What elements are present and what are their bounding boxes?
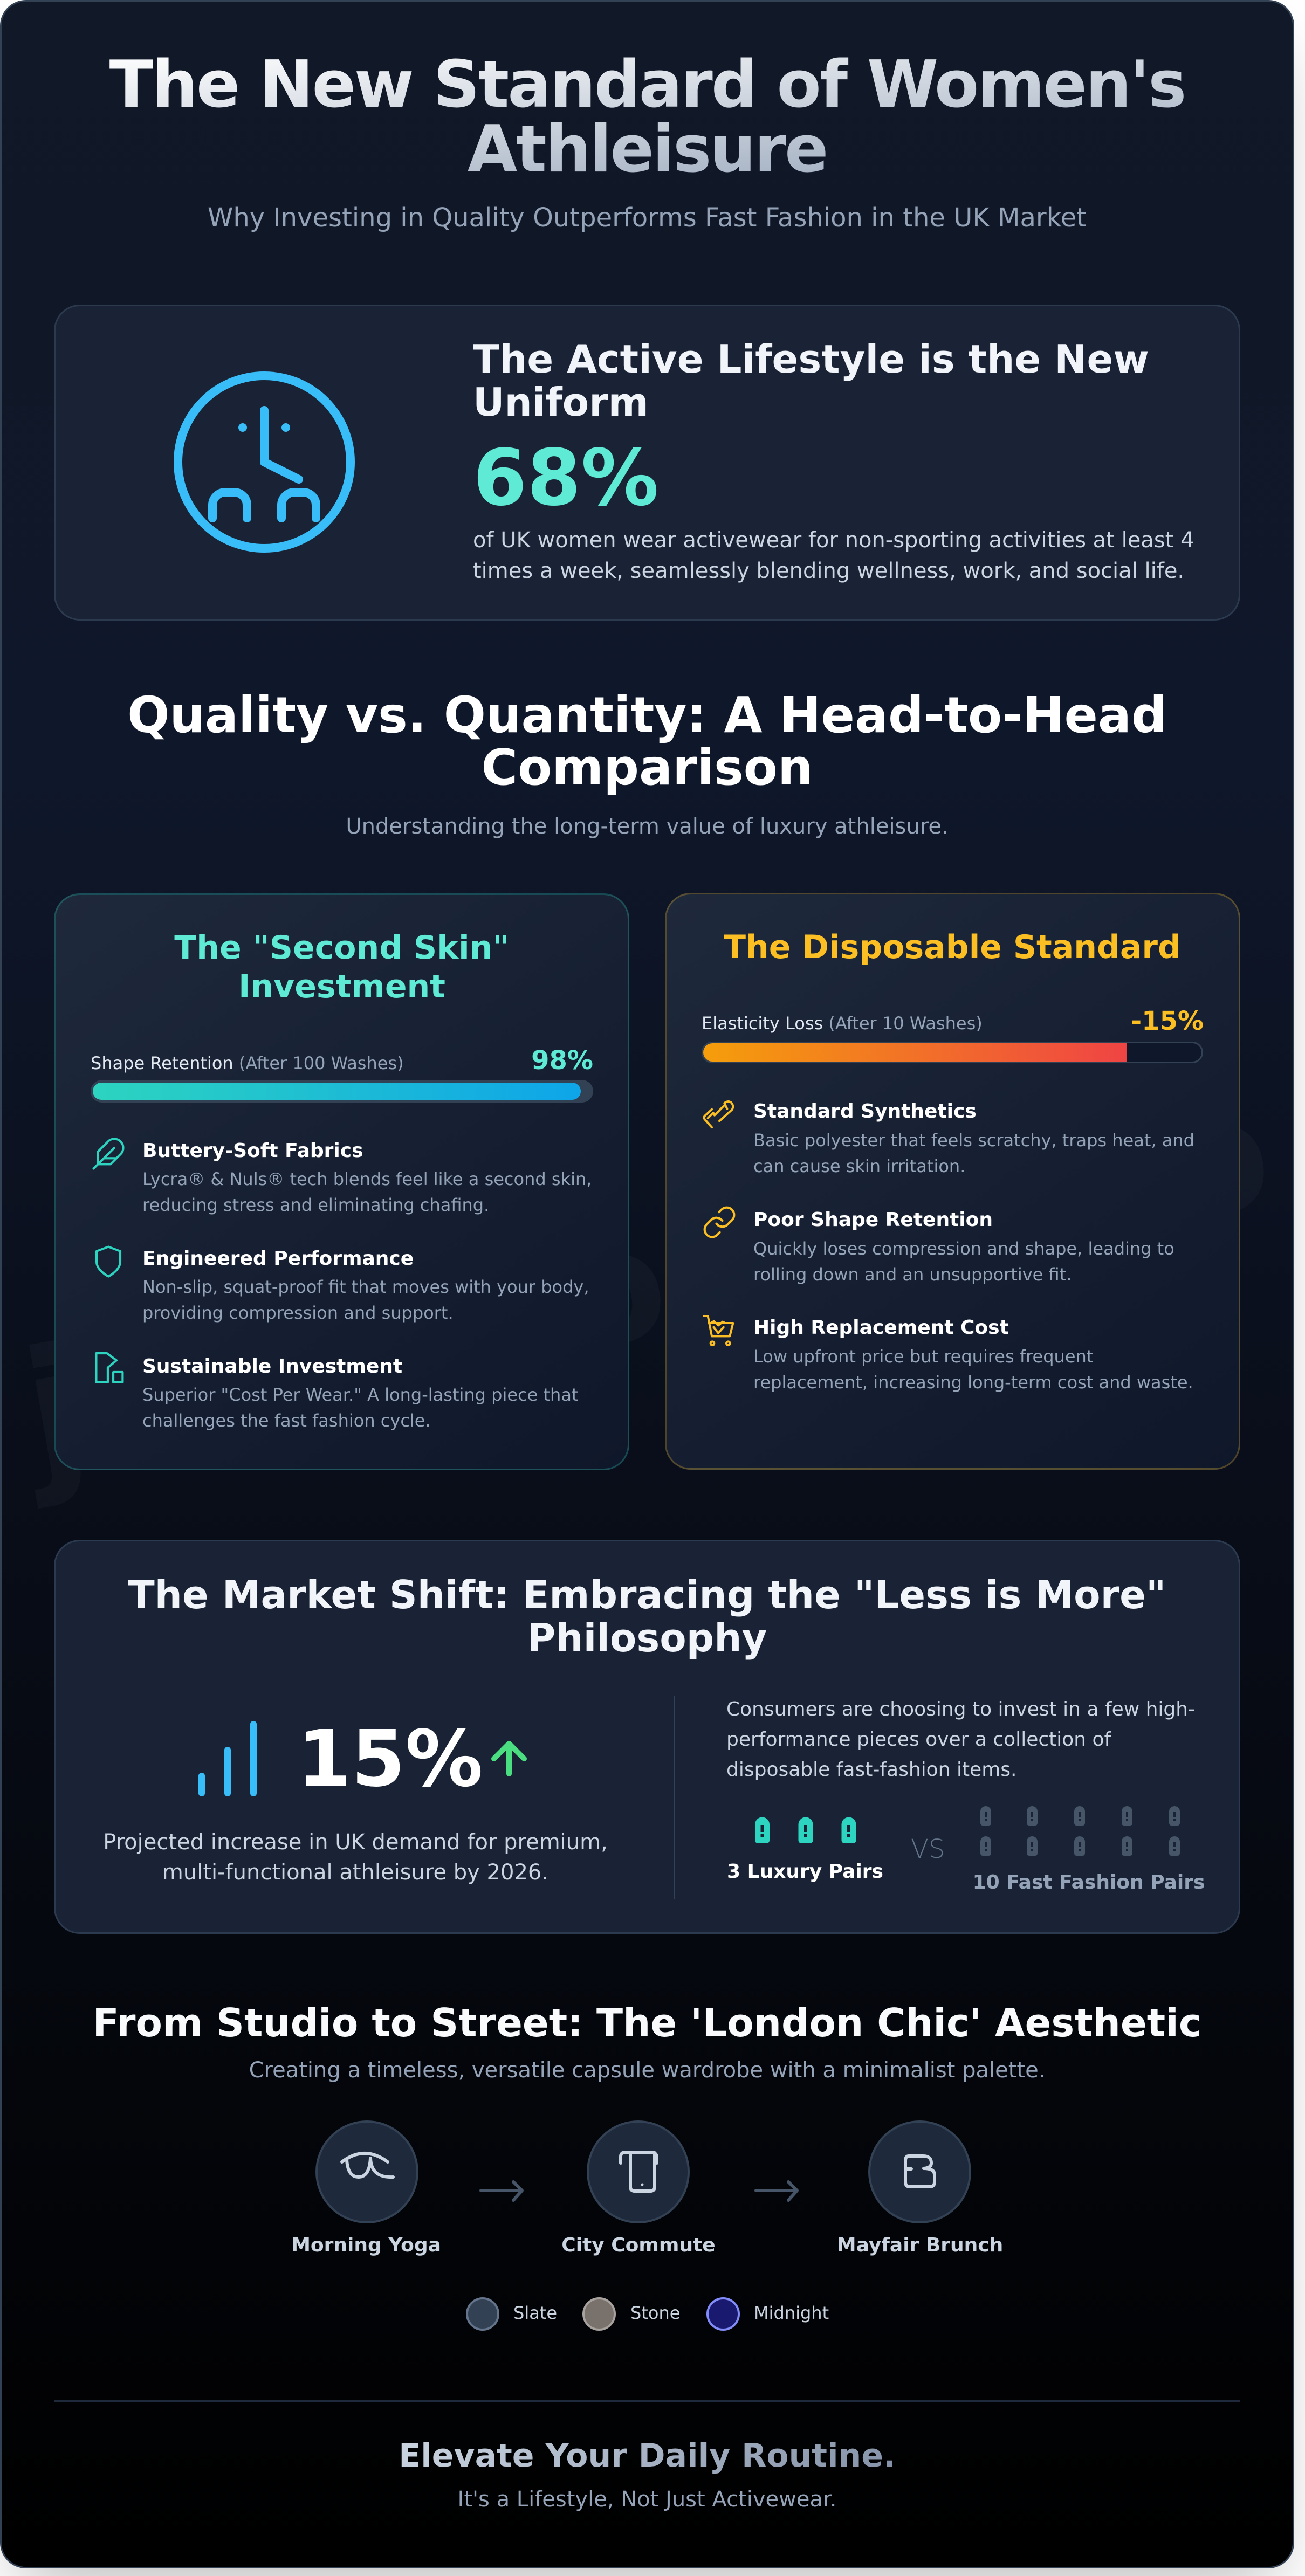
feature: buttery-soft fabrics: Lycra® & Nuls® tech blends feel like a second skin,: [142, 1169, 592, 1189]
feature: sustainable investment: [142, 1355, 578, 1431]
bar: elasticity loss: [702, 1042, 1203, 1063]
text: projected increase: Projected increase in UK demand for premium,: [103, 1830, 608, 1855]
label: shape retention: Shape Retention (After 100 Washes): [91, 1053, 404, 1073]
heading: second skin: [174, 929, 510, 1005]
watermark right letter: o: [1146, 1060, 1283, 1258]
title: The New Standard of Women's: [109, 47, 1185, 122]
feature: poor shape retention: [753, 1209, 1174, 1284]
step: mayfair brunch label: Mayfair Brunch: [837, 2234, 1003, 2256]
heading: disposable standard: The Disposable Standard: [724, 928, 1181, 966]
text: vs: VS: [911, 1834, 945, 1864]
divider: [674, 1696, 675, 1899]
arrow: [756, 2181, 798, 2201]
feature: high replacement cost: replacement, increasing long-term cost and waste.: [753, 1372, 1193, 1392]
feature: standard synthetics: Standard Synthetics: [753, 1100, 977, 1122]
step: city commute circle: [587, 2120, 690, 2223]
feature: sustainable investment: Superior "Cost Per Wear." A long-lasting piece that: [142, 1385, 578, 1405]
heading: active lifestyle: The Active Lifestyle is the New: [473, 336, 1149, 382]
heading: quality vs quantity: Comparison: [482, 739, 813, 796]
feature: buttery-soft fabrics: Buttery-Soft Fabrics: [142, 1140, 363, 1161]
feature: standard synthetics: [753, 1100, 1194, 1176]
title: [81, 53, 1213, 182]
stat: 15%: 15%: [297, 1713, 483, 1804]
subtitle: Why Investing in Quality Outperforms Fast Fashion in the UK Market: [208, 203, 1087, 233]
stat: 68%: 68%: [473, 432, 659, 523]
feature: engineered performance: Engineered Performance: [142, 1248, 414, 1269]
feature: high replacement cost: [753, 1317, 1193, 1392]
footer heading: Elevate Your Daily Routine.: [399, 2437, 896, 2475]
arrow: [481, 2181, 523, 2201]
step: mayfair brunch circle: [868, 2120, 971, 2223]
label: stone: Stone: [630, 2303, 680, 2323]
icon: shield: [95, 1245, 122, 1278]
heading: market shift: Philosophy: [527, 1615, 767, 1661]
text: projected increase: multi-functional athleisure by 2026.: [162, 1860, 548, 1885]
feature: buttery-soft fabrics: reducing stress and eliminating chafing.: [142, 1195, 489, 1215]
subheading: studio to street: Creating a timeless, versatile capsule wardrobe with a minimalist palette.: [249, 2058, 1045, 2083]
panel: second skin investment: [54, 893, 629, 1470]
heading: quality vs quantity: Quality vs. Quantity: A Head-to-Head: [127, 686, 1167, 744]
icon: synthetics: [703, 1100, 734, 1129]
step: morning yoga label: Morning Yoga: [291, 2234, 441, 2256]
feature: high replacement cost: Low upfront price but requires frequent: [753, 1346, 1093, 1366]
feature: sustainable investment: Sustainable Investment: [142, 1355, 402, 1377]
step: morning yoga circle: [315, 2120, 418, 2223]
value: 98%: 98%: [531, 1045, 593, 1076]
text: consumers: Consumers are choosing to invest in a few high-: [726, 1698, 1195, 1720]
feature: engineered performance: providing compression and support.: [142, 1303, 454, 1323]
feature: standard synthetics: Basic polyester that feels scratchy, traps heat, and: [753, 1130, 1194, 1151]
feature: poor shape retention: Quickly loses compression and shape, leading to: [753, 1238, 1174, 1258]
footer divider: [54, 2400, 1240, 2402]
icon: feather: [93, 1138, 125, 1170]
icon: up arrow: [483, 1733, 535, 1785]
panel: active lifestyle: [54, 305, 1240, 621]
text: consumers: [726, 1694, 1195, 1785]
icon: 10 fast fashion pairs: [980, 1806, 1180, 1856]
icon: 3 luxury pairs: [755, 1817, 856, 1843]
heading: market shift: [128, 1572, 1166, 1661]
feature: engineered performance: [142, 1248, 589, 1323]
footer tagline: It's a Lifestyle, Not Just Activewear.: [458, 2487, 836, 2512]
text: stat description: of UK women wear activewear for non-sporting activities at least 4: [473, 527, 1194, 552]
swatch: slate: [466, 2297, 499, 2331]
swatch: midnight: [706, 2297, 740, 2331]
swatch: stone: [582, 2297, 616, 2331]
step: city commute label: City Commute: [561, 2234, 716, 2256]
feature: engineered performance: Non-slip, squat-proof fit that moves with your body,: [142, 1277, 589, 1297]
text: consumers: disposable fast-fashion items.: [726, 1759, 1016, 1780]
feature: high replacement cost: High Replacement Cost: [753, 1317, 1009, 1338]
icon: cart: [703, 1315, 734, 1346]
feature: poor shape retention: rolling down and an unsupportive fit.: [753, 1264, 1072, 1284]
title: Athleisure: [468, 112, 827, 187]
heading: active lifestyle: [473, 336, 1149, 425]
icon: sustainable: [95, 1352, 124, 1383]
feature: poor shape retention: Poor Shape Retention: [753, 1209, 993, 1230]
label: 3 luxury pairs: 3 Luxury Pairs: [727, 1861, 883, 1883]
subheading: quality vs quantity: Understanding the long-term value of luxury athleisure.: [346, 814, 949, 839]
watermark middle letter: o: [542, 1190, 680, 1388]
panel: market shift: [54, 1540, 1240, 1934]
text: consumers: performance pieces over a collection of: [726, 1728, 1111, 1750]
bar: shape retention: [91, 1080, 593, 1103]
feature: standard synthetics: can cause skin irritation.: [753, 1156, 965, 1176]
text: stat description: [473, 527, 1194, 583]
icon: bar chart: [176, 1707, 279, 1810]
feature: sustainable investment: challenges the fast fashion cycle.: [142, 1410, 431, 1431]
panel: disposable standard: [665, 893, 1240, 1470]
heading: active lifestyle: Uniform: [473, 380, 649, 425]
label: slate: Slate: [513, 2303, 557, 2323]
feature: buttery-soft fabrics: [142, 1140, 592, 1215]
label: elasticity loss: Elasticity Loss (After 10 Washes): [702, 1013, 983, 1034]
heading: second skin: The "Second Skin": [174, 929, 510, 967]
heading: market shift: The Market Shift: Embracing the "Less is More": [128, 1572, 1166, 1617]
heading: second skin: Investment: [238, 968, 445, 1005]
heading: quality vs quantity: [127, 686, 1167, 796]
icon: link: [703, 1207, 736, 1238]
label: 10 fast fashion pairs: 10 Fast Fashion Pairs: [973, 1871, 1205, 1893]
icon: clock and chairs: [174, 371, 355, 553]
heading: studio to street: From Studio to Street: The 'London Chic' Aesthetic: [92, 2000, 1202, 2045]
watermark j: j: [10, 1310, 101, 1511]
text: projected increase: [103, 1827, 608, 1888]
label: midnight: Midnight: [754, 2303, 829, 2323]
value: -15%: -15%: [1131, 1006, 1204, 1036]
text: stat description: times a week, seamlessly blending wellness, work, and social life.: [473, 559, 1184, 583]
